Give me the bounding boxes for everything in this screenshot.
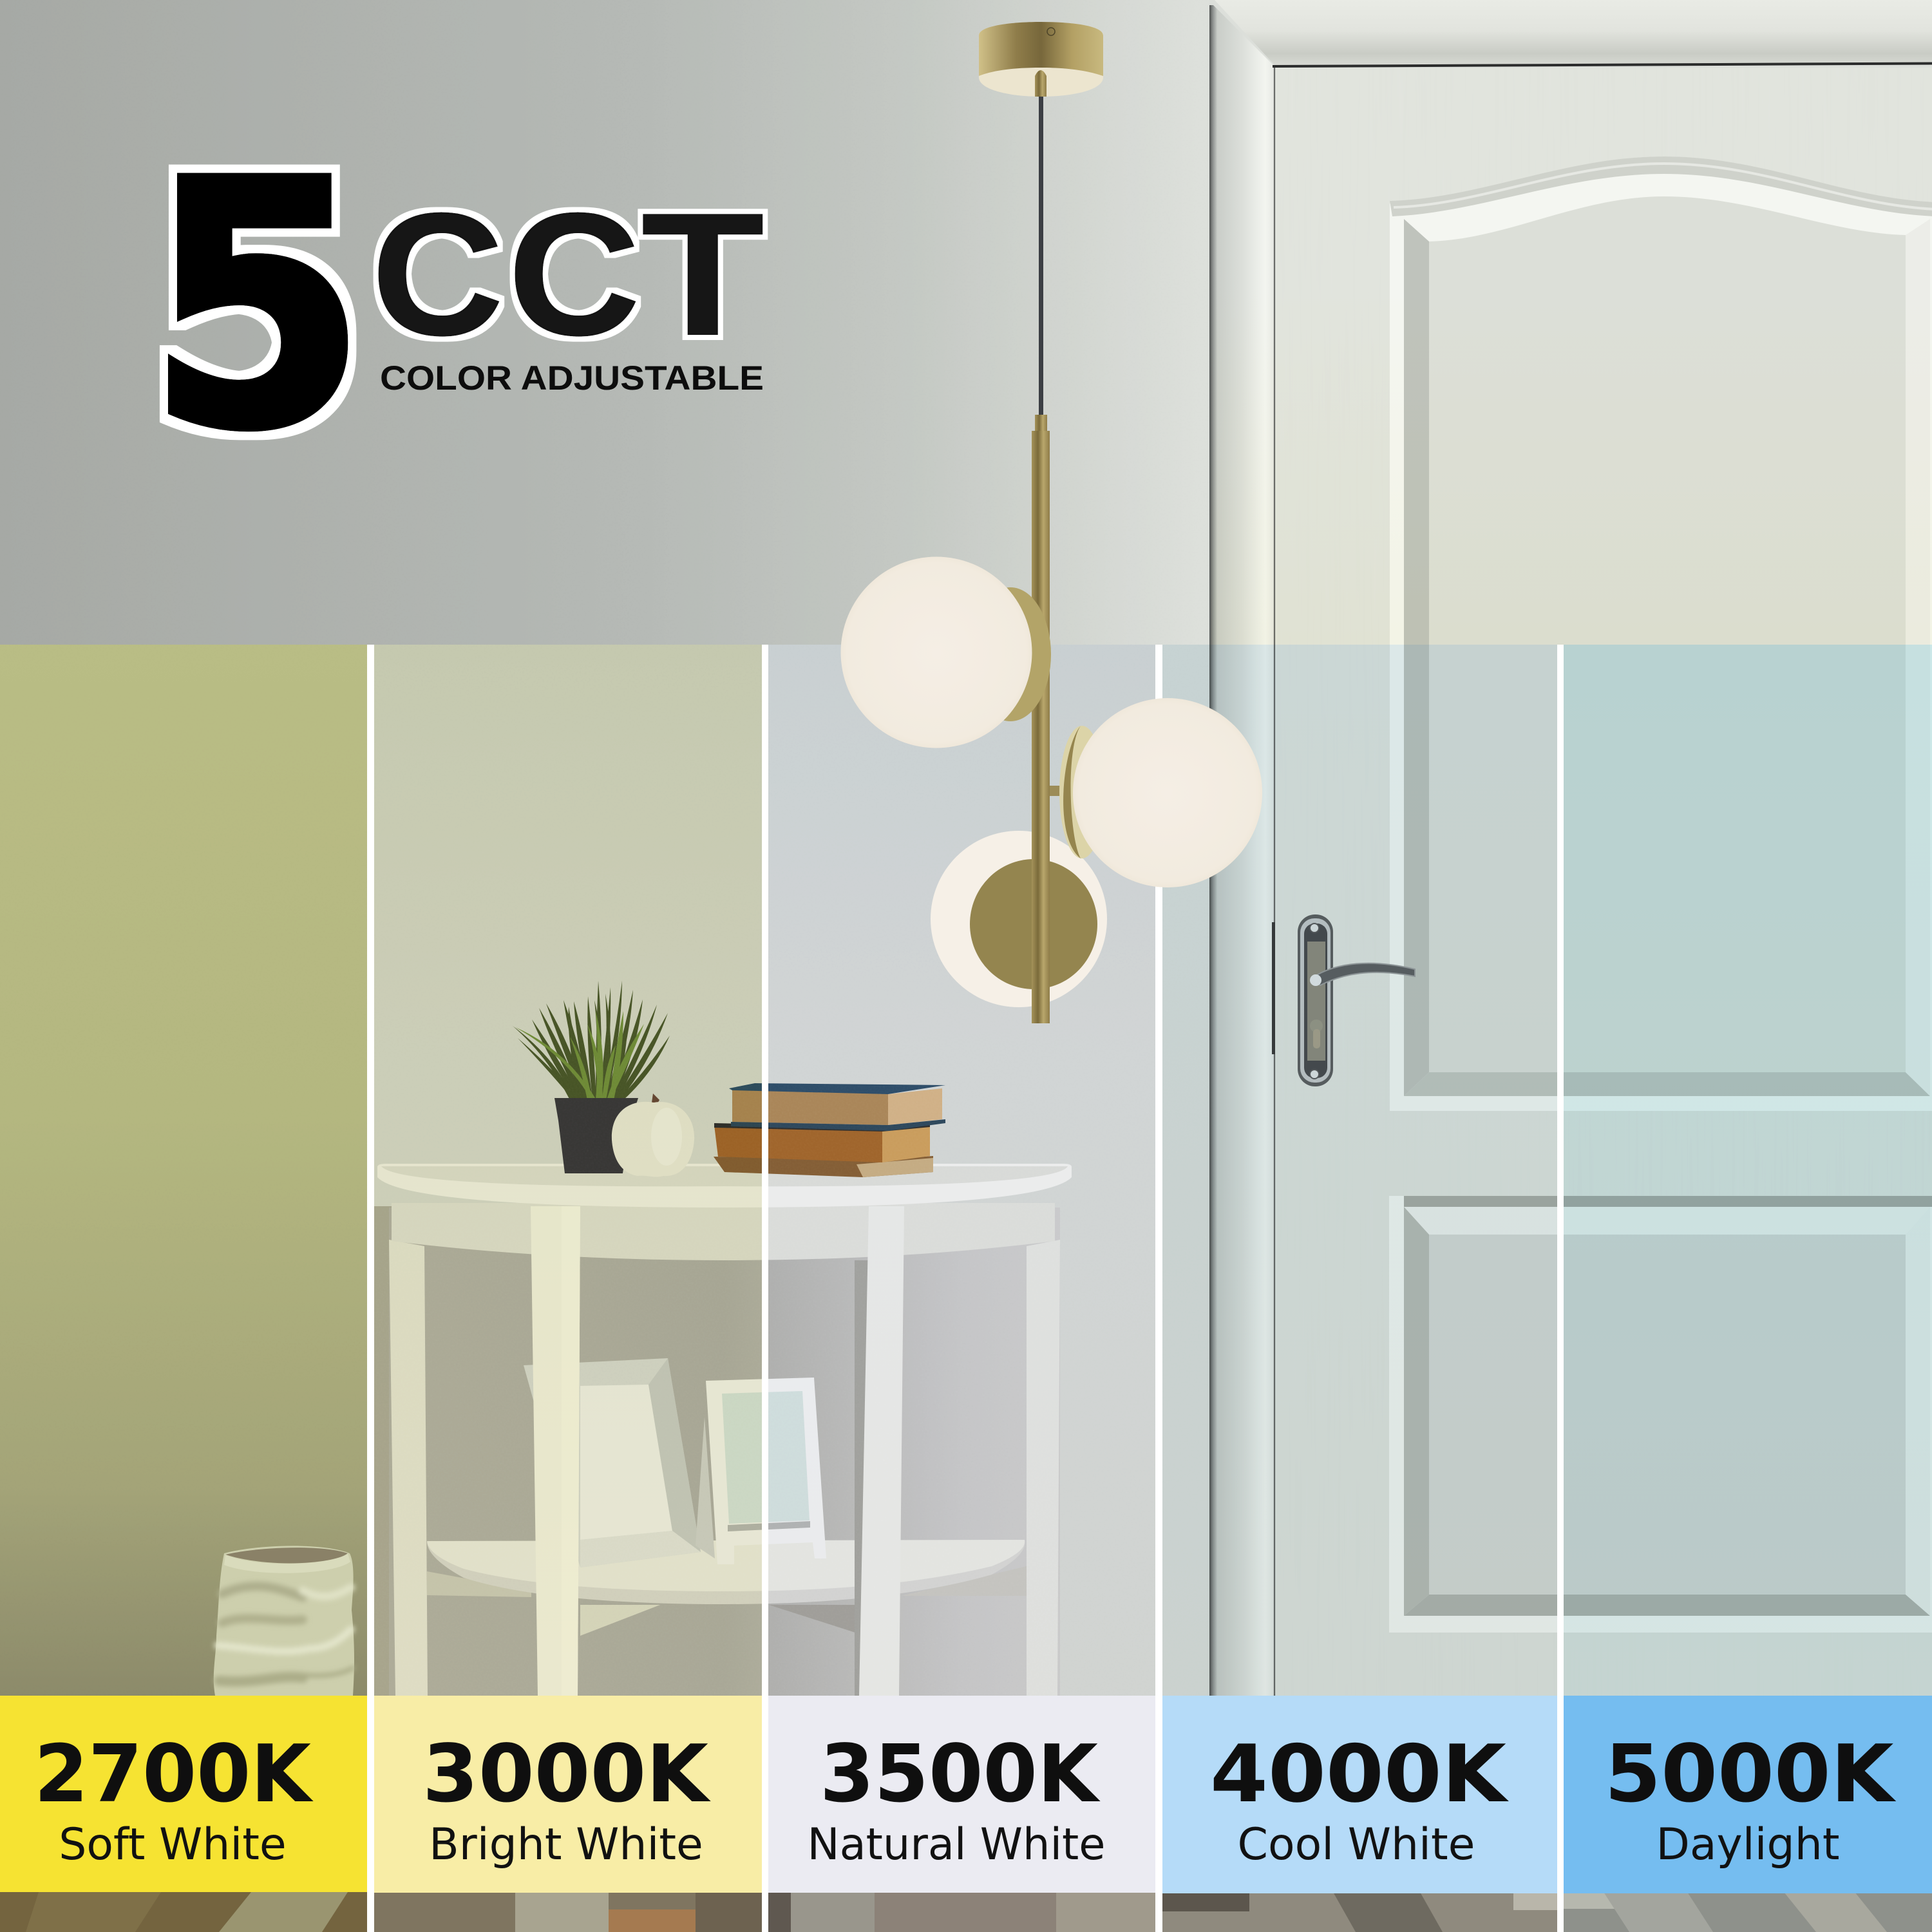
label 5000K	[1564, 1696, 1932, 1893]
cable	[1039, 97, 1043, 415]
potted plant	[513, 981, 670, 1173]
floor under 5000K	[1564, 1892, 1932, 1932]
floor planks	[0, 1892, 1932, 1932]
numeral 5: 5	[148, 110, 366, 502]
lower door panel	[1389, 1196, 1932, 1633]
middle book	[714, 1122, 930, 1162]
label 3500K	[768, 1696, 1155, 1893]
bright plant blades	[515, 1011, 644, 1100]
canopy fitting	[1035, 70, 1046, 97]
upper door panel	[1390, 156, 1932, 1111]
stack of books	[714, 1083, 945, 1177]
colour temperature tint overlays	[0, 645, 1932, 1696]
back globe	[931, 831, 1107, 1007]
tint 3000K	[374, 645, 762, 1696]
wall shadow left of table	[374, 1206, 393, 1696]
back disc	[970, 859, 1097, 989]
picture frame with glass	[696, 1378, 826, 1564]
upper stem	[1035, 415, 1047, 432]
CCT letters	[372, 176, 764, 372]
tint 5000K	[1564, 645, 1932, 1696]
label 3500K: 3500K	[820, 1728, 1101, 1821]
table shelf	[427, 1540, 1027, 1636]
tint 3500K	[768, 645, 1155, 1696]
label 2700K: 2700K	[34, 1728, 314, 1821]
door header	[1215, 0, 1932, 67]
door grain texture	[1275, 68, 1932, 1697]
recess behind table	[389, 1208, 1060, 1697]
label 3000K: Bright White	[429, 1819, 703, 1870]
label 4000K: 4000K	[1210, 1728, 1510, 1821]
floor under 3500K	[768, 1892, 1155, 1932]
tint 4000K	[1162, 645, 1557, 1696]
floor under 4000K	[1162, 1892, 1557, 1932]
door handle	[1272, 914, 1415, 1086]
table front legs	[531, 1206, 904, 1696]
CCT letters: C	[508, 176, 640, 372]
plaster wall texture	[0, 0, 1209, 1696]
CCT letters: C	[372, 176, 504, 372]
ceramic vase	[214, 1546, 354, 1696]
white strip dividers	[367, 645, 1564, 1932]
top left globe	[841, 556, 1032, 748]
door frame casing	[1209, 0, 1932, 1700]
table back legs	[389, 1240, 428, 1696]
right globe connector	[1050, 786, 1061, 796]
label 2700K	[0, 1696, 367, 1892]
ceramic apple	[612, 1094, 694, 1177]
subtitle: COLOR ADJUSTABLE	[380, 359, 764, 397]
right globe disc	[1059, 726, 1104, 858]
label 5000K: 5000K	[1605, 1728, 1897, 1821]
label 5000K: Daylight	[1656, 1819, 1839, 1870]
tint 2700K	[0, 645, 368, 1696]
top globe disc	[970, 587, 1051, 721]
right globe	[1073, 698, 1262, 887]
heading badge: 5 CCT	[148, 110, 764, 502]
upper neutral lighting zone	[0, 0, 1932, 645]
console table	[377, 1164, 1072, 1697]
door	[1272, 68, 1932, 1697]
top book	[729, 1083, 945, 1131]
warm cast on upper door	[1211, 290, 1932, 645]
table top	[377, 1164, 1072, 1208]
label 3000K	[374, 1696, 762, 1893]
label 4000K	[1162, 1696, 1557, 1893]
plant pot	[554, 1098, 638, 1173]
floor under 2700K	[0, 1892, 367, 1932]
label 3000K: 3000K	[422, 1728, 712, 1821]
floor under 3000K	[374, 1892, 762, 1932]
picture frame ornate	[524, 1358, 701, 1567]
ceiling canopy	[979, 22, 1103, 97]
bottom book	[714, 1156, 933, 1177]
label 2700K: Soft White	[59, 1819, 287, 1870]
label 4000K: Cool White	[1238, 1819, 1475, 1870]
label 3500K: Natural White	[808, 1819, 1105, 1870]
CCT letters: T	[641, 177, 764, 371]
plant blades	[513, 981, 670, 1100]
pendant lamp	[841, 22, 1262, 1023]
table apron	[392, 1203, 1055, 1260]
main stem	[1032, 431, 1050, 1023]
